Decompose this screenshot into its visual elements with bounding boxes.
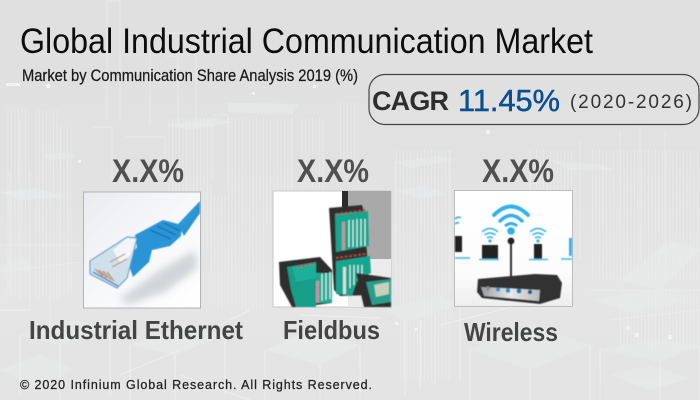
footer: copyright: © 2020 Infinium Global Research. All Rights Reserved. — [20, 378, 372, 392]
callout: CAGR — [369, 74, 699, 124]
title: Global Industrial Communication Market — [20, 22, 593, 61]
value: Wireless share: X.X% — [482, 153, 554, 189]
value: Industrial Ethernet share: X.X% — [112, 153, 184, 189]
panel: Fieldbus — [273, 153, 391, 345]
image: wireless router — [454, 190, 572, 306]
callout: CAGR: 11.45% — [458, 83, 560, 118]
image: fieldbus modules — [273, 191, 391, 307]
label: Wireless: Wireless — [464, 317, 558, 347]
label: Industrial Ethernet: Industrial Ethernet — [29, 315, 243, 345]
value: Fieldbus share: X.X% — [297, 153, 369, 189]
callout: CAGR: (2020-2026) — [570, 92, 692, 113]
label: Fieldbus: Fieldbus — [283, 315, 380, 345]
image: blue ethernet cable — [84, 192, 200, 308]
callout: CAGR: CAGR — [372, 86, 449, 116]
panel: Wireless — [454, 153, 572, 347]
subtitle: Market by Communication Share Analysis 2019 (%) — [22, 67, 358, 85]
panel: Industrial Ethernet — [29, 153, 243, 345]
